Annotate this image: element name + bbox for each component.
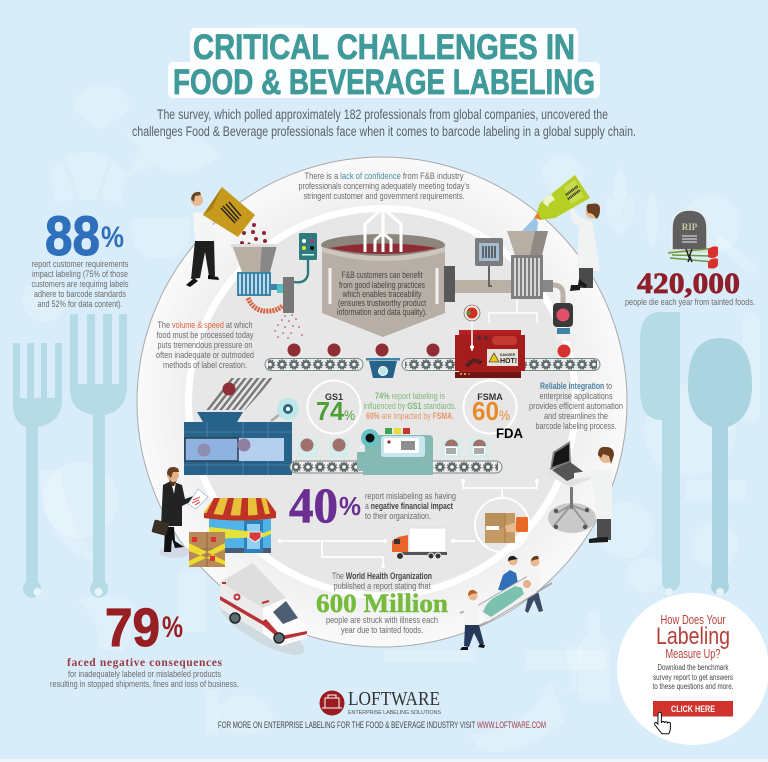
statistic: 40 percent: % bbox=[339, 491, 361, 521]
statistic: 40 percent bbox=[289, 477, 361, 533]
text: negative consequences: for inadequately labeled or mislabeled products bbox=[68, 669, 221, 680]
hatched feed belt and hopper bbox=[197, 378, 299, 422]
utensils: right knife bbox=[640, 312, 680, 596]
call to action circle: Download the benchmark bbox=[658, 663, 729, 672]
GS1 badge: 74 bbox=[316, 396, 345, 426]
text: World Health Organization: The World Health Organization bbox=[332, 571, 432, 582]
text: World Health Organization: published a report stating that bbox=[334, 581, 431, 592]
grinder left bbox=[231, 244, 308, 313]
subtitle bbox=[132, 107, 636, 139]
unlabeled items bbox=[298, 438, 349, 458]
text: 88 percent detail bbox=[32, 259, 129, 310]
text: illness: year due to tainted foods. bbox=[341, 625, 423, 636]
conveyor items bbox=[288, 344, 440, 356]
control box bbox=[299, 233, 317, 260]
text: 88 percent detail: customers are requiring labels bbox=[32, 279, 129, 290]
text: lack of confidence: stringent customer and government requirements. bbox=[304, 191, 464, 202]
person pouring bottle bbox=[522, 175, 600, 291]
overheating red machine: DANGER bbox=[500, 353, 516, 357]
button: CLICK HERE bbox=[671, 704, 715, 714]
Loftware logo bbox=[320, 688, 441, 716]
text: volume and speed: puts tremendous pressure on bbox=[158, 340, 252, 351]
tank text: which enables traceability bbox=[342, 289, 422, 300]
Loftware logo: ENTERPRISE LABELING SOLUTIONS bbox=[348, 710, 441, 716]
tank text bbox=[337, 270, 427, 318]
call to action circle: survey report to get answers bbox=[653, 673, 733, 682]
FSMA badge bbox=[464, 380, 516, 434]
paramedics and stretcher bbox=[460, 556, 552, 650]
text: reliable integration: and streamlines the bbox=[544, 411, 608, 422]
call to action circle: to these questions and more. bbox=[652, 682, 734, 691]
text: volume and speed: often inadequate or outmoded bbox=[156, 350, 254, 361]
falling ingredients bbox=[240, 223, 267, 246]
Loftware logo: LOFTWARE bbox=[348, 688, 440, 710]
GS1 badge: % bbox=[344, 407, 355, 423]
person at laptop bbox=[544, 441, 614, 543]
text: negative financial impact bbox=[365, 491, 456, 522]
text: illness bbox=[326, 615, 438, 636]
text: reliable integration: provides efficient automation bbox=[529, 401, 623, 412]
statistic: 420,000: 420,000 bbox=[637, 267, 740, 300]
FSMA badge: 60 bbox=[472, 396, 499, 426]
footer: FOR MORE ON ENTERPRISE LABELING FOR THE FOOD & BEVERAGE INDUSTRY VISIT WWW.LOFTWARE.COM bbox=[218, 720, 546, 730]
statistic: 88 percent: % bbox=[101, 221, 124, 254]
businessman bbox=[151, 467, 208, 558]
text: lack of confidence: There is a lack of confidence from F&B industry bbox=[304, 171, 464, 182]
text: reliable integration bbox=[529, 381, 623, 432]
powder spray bbox=[274, 314, 303, 339]
call to action circle bbox=[617, 593, 768, 745]
pipe and gauge bbox=[444, 238, 512, 302]
text: volume and speed: methods of label creation. bbox=[163, 360, 247, 371]
overheating red machine bbox=[455, 305, 525, 378]
text: World Health Organization bbox=[332, 571, 432, 592]
ambulance bbox=[213, 563, 311, 664]
lower conveyor bbox=[290, 461, 502, 473]
blue processing machine bbox=[184, 422, 292, 475]
statistic: 79 percent: 79 bbox=[105, 598, 160, 658]
tank text: information and data quality). bbox=[337, 307, 427, 318]
statistic: 600 million: 600 Million bbox=[316, 589, 449, 618]
utensils: second left fork bbox=[70, 314, 127, 598]
gravestone with flowers: RIP bbox=[682, 222, 698, 232]
central plate bbox=[137, 157, 627, 647]
text: volume and speed bbox=[156, 320, 254, 371]
text: lack of confidence bbox=[298, 171, 470, 202]
title bbox=[168, 28, 600, 102]
text: negative consequences: faced negative consequences bbox=[67, 657, 223, 669]
text: reliable integration: Reliable integration to bbox=[540, 381, 612, 392]
person pouring bag bbox=[186, 187, 255, 287]
text: lack of confidence: professionals concerning adequately meeting today’s bbox=[298, 181, 470, 192]
text: 88 percent detail: and 52% for data content). bbox=[38, 299, 122, 310]
text: volume and speed: The volume & speed at which bbox=[158, 320, 252, 331]
text: GS1 and FSMA statistics: 60% are impacted by FSMA. bbox=[366, 411, 454, 422]
taped boxes bbox=[189, 532, 225, 567]
top conveyor bbox=[265, 358, 600, 370]
button bbox=[653, 701, 733, 716]
tank text: from good labeling practices bbox=[339, 280, 425, 291]
grinder right bbox=[489, 231, 563, 323]
text: negative consequences bbox=[50, 657, 239, 690]
subtitle: The survey, which polled approximately 182 professionals from global companies, uncovered the bbox=[157, 107, 608, 122]
FSMA badge: FSMA bbox=[477, 392, 503, 402]
labeling machine bbox=[357, 428, 433, 475]
shipping box circle bbox=[475, 498, 529, 552]
title: FOOD & BEVERAGE LABELING bbox=[173, 63, 595, 102]
tank text: F&B customers can benefit bbox=[342, 270, 423, 281]
text: reliable integration: barcode labeling process. bbox=[536, 421, 616, 432]
icon: hand cursor bbox=[655, 712, 670, 734]
text: GS1 and FSMA statistics bbox=[364, 391, 456, 422]
text: negative financial impact: a negative financial impact bbox=[365, 501, 454, 512]
call to action circle: Measure Up? bbox=[666, 647, 721, 661]
text: negative financial impact: to their organization. bbox=[365, 511, 431, 522]
call to action circle: Labeling bbox=[656, 623, 730, 650]
text: 88 percent detail: report customer requirements bbox=[32, 259, 129, 270]
subtitle: challenges Food & Beverage professionals face when it comes to barcode labeling in a global supply chain. bbox=[132, 124, 636, 139]
delivery truck bbox=[392, 528, 447, 560]
text: 88 percent detail: adhere to barcode standards bbox=[34, 289, 126, 300]
closed shop bbox=[204, 498, 276, 553]
mixing tank bbox=[321, 208, 445, 337]
text: GS1 and FSMA statistics: influenced by GS1 standards. bbox=[364, 401, 456, 412]
overheating red machine: HOT! bbox=[500, 358, 517, 365]
tank text: (ensures trustworthy product bbox=[338, 298, 426, 309]
statistic: 88 percent: 88 bbox=[45, 204, 100, 267]
text: reliable integration: enterprise applications bbox=[540, 391, 613, 402]
title: CRITICAL CHALLENGES IN bbox=[193, 28, 575, 67]
utensils: left fork bbox=[13, 343, 62, 598]
connector lines bbox=[278, 479, 539, 568]
text: negative consequences: resulting in stopped shipments, fines and loss of business. bbox=[50, 679, 239, 690]
text: negative financial impact: report mislabeling as having bbox=[365, 491, 456, 502]
call to action circle: How Does Your bbox=[660, 613, 726, 627]
labeled items bbox=[441, 438, 489, 458]
GS1 badge: GS1 bbox=[325, 392, 343, 402]
weighing scale bbox=[366, 358, 400, 378]
FDA mark: FDA bbox=[496, 425, 523, 441]
gravestone with flowers bbox=[668, 210, 718, 269]
statistic: 40 percent: 40 bbox=[289, 477, 338, 533]
text: volume and speed: food must be processed today bbox=[156, 330, 254, 341]
utensils: right spoon bbox=[688, 338, 752, 596]
text: illness: people are struck with illness each bbox=[326, 615, 438, 626]
GS1 badge bbox=[308, 380, 360, 434]
filling valve bbox=[553, 303, 573, 358]
statistic: 79 percent: % bbox=[162, 611, 183, 644]
text: 88 percent detail: impact labeling (75% of those bbox=[32, 269, 128, 280]
text: GS1 and FSMA statistics: 74% report labeling is bbox=[375, 391, 445, 402]
FSMA badge: % bbox=[499, 407, 510, 423]
